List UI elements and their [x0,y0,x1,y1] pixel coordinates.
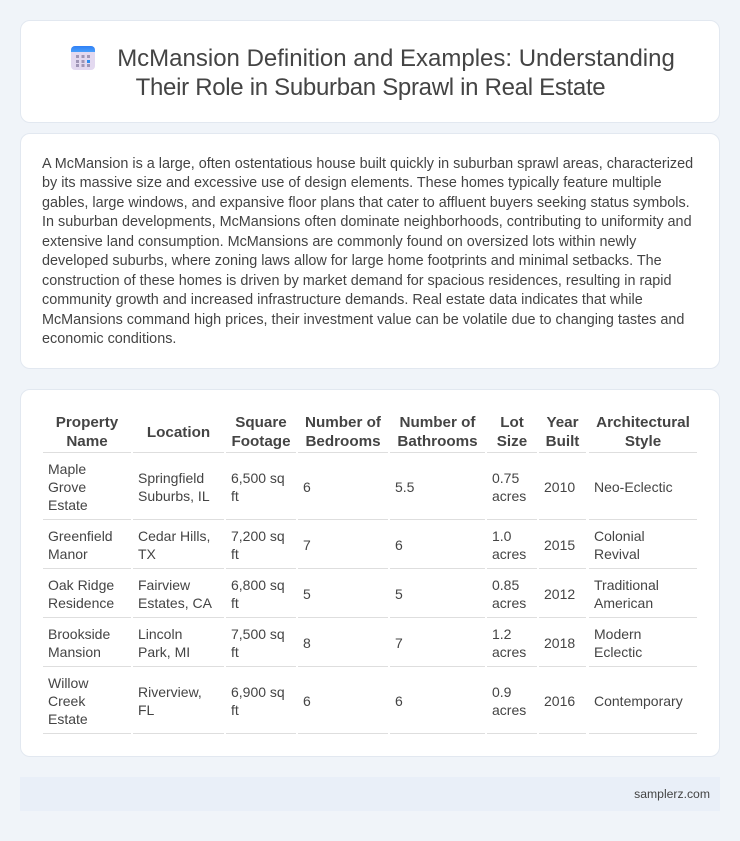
description text [42,156,693,347]
title: Their Role in Suburban Sprawl in Real Estate [136,74,605,100]
table header: Number of [305,414,381,431]
row: Brookside Mansion: 7,500 sq [231,626,285,642]
icon: calendar [71,46,95,70]
table header [56,414,690,450]
row: Oak Ridge Residence: Oak Ridge [48,577,114,593]
title card [20,20,720,123]
row: Maple Grove Estate: Grove [48,479,86,495]
table header: Location [147,424,210,441]
row: Willow Creek Estate: 6,900 sq [231,684,285,700]
row: Greenfield Manor: 1.0 [492,528,511,544]
row: Maple Grove Estate: acres [492,488,526,504]
row: Brookside Mansion [48,626,642,660]
row: Willow Creek Estate: 2016 [544,693,575,709]
row: Greenfield Manor: Colonial [594,528,645,544]
row: Willow Creek Estate: Riverview, [138,684,202,700]
row: Maple Grove Estate: 5.5 [395,479,414,495]
description text: construction of these homes is driven by market demand for spacious residences, resulting in rapid [42,273,672,289]
row: Maple Grove Estate: Maple [48,461,86,477]
description text: economic conditions. [42,331,176,347]
row: Maple Grove Estate: ft [231,488,239,504]
table header: Footage [231,433,291,450]
row: Willow Creek Estate: acres [492,702,526,718]
row: Maple Grove Estate: 6,500 sq [231,470,285,486]
row: Brookside Mansion: 7 [395,635,403,651]
row: Willow Creek Estate: FL [138,702,154,718]
table header: Bathrooms [397,433,478,450]
row: Maple Grove Estate: 2010 [544,479,575,495]
table header: Year [546,414,579,431]
description text: extensive land consumption. McMansions are commonly found on oversized lots within newly [42,234,636,250]
title [117,45,675,100]
row: Oak Ridge Residence: 6,800 sq [231,577,285,593]
table header: Square [235,414,287,431]
row: Greenfield Manor: Manor [48,546,88,562]
row: Greenfield Manor: Cedar Hills, [138,528,210,544]
row: Greenfield Manor: 2015 [544,537,575,553]
row: Greenfield Manor: 7 [303,537,311,553]
table card [20,389,720,757]
row: Oak Ridge Residence: ft [231,595,239,611]
row: Brookside Mansion: 2018 [544,635,575,651]
table header: Style [625,433,661,450]
row: Oak Ridge Residence [48,577,659,611]
description text: gables, large windows, and expansive floor plans that cater to affluent buyers seeking status symbols. [42,195,690,211]
row: Brookside Mansion: Lincoln [138,626,182,642]
row: Brookside Mansion: ft [231,644,239,660]
row: Willow Creek Estate: Willow [48,675,88,691]
row: Brookside Mansion: Mansion [48,644,101,660]
row: Oak Ridge Residence: Traditional [594,577,659,593]
row: Brookside Mansion: Modern [594,626,641,642]
row: Greenfield Manor: 6 [395,537,403,553]
table header: Name [66,433,108,450]
footer bar [20,777,720,811]
row: Willow Creek Estate: ft [231,702,239,718]
row: Oak Ridge Residence: Residence [48,595,114,611]
table header: Property [56,414,118,431]
table header: Number of [400,414,475,431]
table header: Lot [500,414,524,431]
row: Greenfield Manor: Greenfield [48,528,113,544]
row: Greenfield Manor: TX [138,546,156,562]
title: McMansion Definition and Examples: Understanding [117,45,675,72]
row: Oak Ridge Residence: Estates, CA [138,595,212,611]
row: Brookside Mansion: Eclectic [594,644,642,660]
row: Greenfield Manor [48,528,645,562]
row: Maple Grove Estate: 6 [303,479,311,495]
description text: McMansions command high prices, their investment value can be volatile due to changing tastes and [42,312,684,328]
row: Oak Ridge Residence: 2012 [544,586,575,602]
table header: Architectural [596,414,690,431]
row: Willow Creek Estate: 6 [303,693,311,709]
row: Maple Grove Estate: Estate [48,497,88,513]
row: Greenfield Manor: Revival [594,546,640,562]
row: Willow Creek Estate [48,675,683,727]
property table [43,414,697,734]
row: Brookside Mansion: Brookside [48,626,110,642]
row: Oak Ridge Residence: acres [492,595,526,611]
row: Maple Grove Estate: 0.75 [492,470,519,486]
row: Willow Creek Estate: Creek [48,693,85,709]
description card [20,133,720,369]
description text: community growth and increased infrastructure demands. Real estate data indicates that while [42,292,643,308]
row: Willow Creek Estate: 0.9 [492,684,511,700]
row: Brookside Mansion: acres [492,644,526,660]
row: Brookside Mansion: Park, MI [138,644,190,660]
description text: by its massive size and excessive use of design elements. These homes typically feature multiple [42,175,662,191]
row: Maple Grove Estate: Suburbs, IL [138,488,210,504]
row: Greenfield Manor: ft [231,546,239,562]
row: Oak Ridge Residence: 5 [395,586,403,602]
row: Oak Ridge Residence: American [594,595,653,611]
description text: In suburban developments, McMansions often dominate neighborhoods, contributing to uniformity and [42,214,692,230]
row: Maple Grove Estate: Springfield [138,470,204,486]
row: Greenfield Manor: acres [492,546,526,562]
row: Maple Grove Estate: Neo-Eclectic [594,479,673,495]
row: Brookside Mansion: 1.2 [492,626,511,642]
description text: developed suburbs, where zoning laws allow for large home footprints and minimal setbacks. The [42,253,662,269]
row: Oak Ridge Residence: Fairview [138,577,190,593]
row: Willow Creek Estate: 6 [395,693,403,709]
footer text: samplerz.com: samplerz.com [634,787,710,801]
row: Brookside Mansion: 8 [303,635,311,651]
row: Maple Grove Estate [48,461,673,513]
row: Willow Creek Estate: Estate [48,711,88,727]
table header: Bedrooms [305,433,381,450]
table header: Size [497,433,527,450]
row: Oak Ridge Residence: 0.85 [492,577,519,593]
row: Greenfield Manor: 7,200 sq [231,528,285,544]
description text: A McMansion is a large, often ostentatious house built quickly in suburban sprawl areas, characterized [42,156,693,172]
row: Willow Creek Estate: Contemporary [594,693,683,709]
table header: Built [546,433,579,450]
row: Oak Ridge Residence: 5 [303,586,311,602]
